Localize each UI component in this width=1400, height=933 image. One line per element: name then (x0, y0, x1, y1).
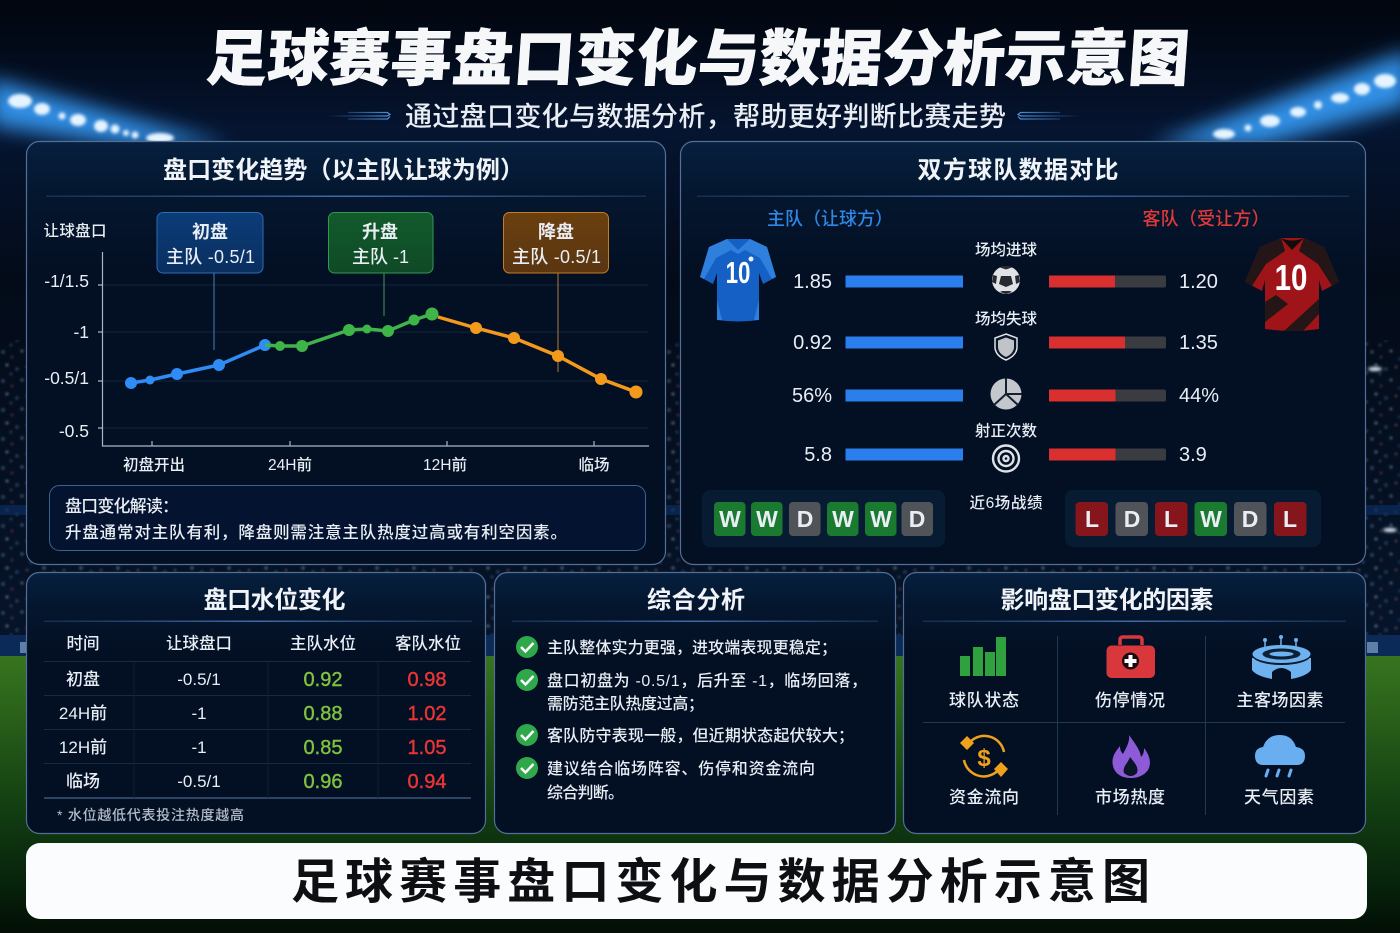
away recent form: L (1164, 506, 1178, 532)
away recent form: D (1242, 506, 1258, 532)
title: 足球赛事盘口变化与数据分析示意图 (204, 25, 1192, 93)
factor: home and away stadium: 主客场因素 (1236, 690, 1324, 710)
factor: market heat (1095, 735, 1165, 807)
interpretation note: 盘口变化解读： (65, 496, 179, 516)
stat row: possession: 56% (792, 385, 832, 407)
table: water levels: -1 (191, 704, 207, 723)
icon: red jersey: 10 (1275, 257, 1307, 298)
line chart: 让球盘口 (44, 222, 106, 240)
icon: red jersey (1245, 238, 1339, 331)
table: water levels: 0.94 (408, 771, 446, 793)
factor: injuries: 伤停情况 (1095, 691, 1165, 710)
table: water levels: -0.5/1 (177, 670, 221, 689)
stat row: goals against (793, 310, 1218, 360)
callout: line rise: 升盘 (362, 221, 398, 242)
series: drop in orange (438, 317, 642, 398)
table: water levels: 主队水位 (290, 633, 356, 653)
bullet 1: 主队整体实力更强，进攻端表现更稳定； (547, 638, 837, 657)
callout: opening line: 主队 -0.5/1 (166, 247, 255, 267)
table: water levels: 24H前 (59, 704, 107, 723)
stat row: goals for: 1.20 (1179, 271, 1218, 293)
factor: team form: 球队状态 (949, 691, 1019, 710)
line chart: 临场 (578, 456, 610, 474)
callout: line drop: 降盘 (538, 221, 574, 242)
stat row: shots on target (804, 422, 1207, 472)
bullet 4: 建议结合临场阵容、伤停和资金流向 (547, 759, 815, 778)
table: water levels: 0.88 (304, 703, 342, 725)
away recent form: D (1124, 506, 1140, 532)
callout: opening line (157, 212, 263, 273)
heading: team comparison: 双方球队数据对比 (918, 156, 1118, 184)
home recent form: D (909, 506, 925, 532)
callout: line rise (328, 212, 433, 273)
table: water levels: 初盘 (66, 670, 100, 689)
panel: influencing factors (904, 572, 1366, 834)
stat row: possession: 44% (1179, 385, 1219, 407)
callout: line drop (504, 212, 608, 273)
stat row: goals against: 场均失球 (975, 310, 1037, 328)
stat row: shots on target: 射正次数 (975, 422, 1037, 440)
callout: opening line: 初盘 (192, 221, 228, 242)
home recent form: W (832, 506, 854, 532)
factor: home and away stadium (1236, 635, 1324, 710)
line chart: -1 (73, 322, 89, 342)
icon: blue jersey: 10 (726, 255, 750, 290)
bullet 2: 需防范主队热度过高； (547, 694, 704, 713)
factor: money flow: $ (977, 745, 991, 772)
home recent form (702, 490, 945, 547)
table: water levels: 0.96 (304, 771, 342, 793)
home team label: 主队（让球方） (767, 209, 893, 229)
panel: overall analysis (494, 572, 896, 834)
table: water levels: 1.05 (408, 737, 446, 759)
home recent form: W (719, 506, 741, 532)
away recent form (1065, 490, 1321, 547)
callout: line rise: 主队 -1 (352, 247, 409, 267)
bullet 4 (516, 757, 815, 802)
series: rise in green (265, 308, 438, 352)
line chart: 初盘开出 (123, 456, 185, 474)
line chart: -0.5 (59, 421, 89, 441)
series: opening in blue (125, 339, 271, 389)
stat row: possession (792, 378, 1219, 410)
bullet 2 (516, 669, 867, 713)
factor: weather: 天气因素 (1244, 788, 1314, 807)
bullet 3: 客队防守表现一般，但近期状态起伏较大； (547, 726, 854, 745)
table: water levels: 让球盘口 (166, 634, 232, 653)
heading: water levels: 盘口水位变化 (204, 586, 346, 614)
interpretation note (50, 486, 646, 550)
stat row: goals against: 0.92 (793, 332, 832, 354)
interpretation note: 升盘通常对主队有利，降盘则需注意主队热度过高或有利空因素。 (65, 523, 567, 542)
footnote: * 水位越低代表投注热度越高 (57, 807, 244, 823)
recent form label: 近6场战绩 (970, 494, 1043, 512)
bullet 2: 盘口初盘为 -0.5/1，后升至 -1，临场回落， (547, 672, 867, 690)
stat row: goals for: 1.85 (793, 271, 832, 293)
bullet 4: 综合判断。 (547, 783, 624, 802)
panel: water level changes (26, 572, 486, 834)
factor: money flow: 资金流向 (949, 787, 1019, 807)
factor: money flow (949, 736, 1019, 807)
table: water levels: 0.98 (408, 669, 446, 691)
factor: weather (1244, 735, 1314, 807)
factor: market heat: 市场热度 (1095, 788, 1165, 807)
bullet 1 (516, 636, 837, 658)
icon: football (992, 266, 1020, 294)
panel: handicap trend (26, 142, 666, 564)
table: water levels: 1.02 (408, 703, 446, 725)
away recent form: L (1283, 506, 1297, 532)
line chart (44, 222, 649, 474)
table: water levels: 0.92 (304, 669, 342, 691)
factor: injuries (1095, 637, 1165, 710)
table: water levels: 客队水位 (395, 633, 461, 653)
callout: line drop: 主队 -0.5/1 (512, 247, 601, 267)
icon: target (993, 446, 1019, 472)
icon: shield (995, 334, 1017, 360)
away recent form: W (1200, 506, 1222, 532)
stat row: shots on target: 3.9 (1179, 444, 1207, 466)
line chart: -1/1.5 (44, 271, 89, 291)
callout connectors (214, 273, 558, 372)
icon: pie chart (990, 378, 1022, 410)
line chart: -0.5/1 (44, 368, 89, 388)
stat row: goals against: 1.35 (1179, 332, 1218, 354)
subtitle: 通过盘口变化与数据分析，帮助更好判断比赛走势 (405, 102, 1006, 132)
table: water levels: -1 (191, 738, 207, 757)
table: water levels: 临场 (66, 772, 100, 791)
bottom banner (26, 843, 1367, 919)
icon: blue jersey (700, 239, 776, 322)
table: water levels: 0.85 (304, 737, 342, 759)
factor: team form (949, 637, 1019, 710)
panel: team comparison (680, 142, 1366, 564)
line chart: 24H前 (268, 456, 312, 474)
home recent form: W (756, 506, 778, 532)
table: water levels: -0.5/1 (177, 772, 221, 791)
stat row: goals for: 场均进球 (975, 241, 1037, 259)
away recent form: L (1085, 506, 1099, 532)
stat row: goals for (793, 241, 1218, 294)
table: water levels: 12H前 (59, 738, 107, 757)
heading: overall analysis: 综合分析 (647, 587, 745, 614)
home recent form: W (870, 506, 892, 532)
heading: influencing factors: 影响盘口变化的因素 (1000, 586, 1214, 614)
away team label: 客队（受让方） (1142, 209, 1270, 229)
table: water levels (44, 633, 471, 798)
line chart: 12H前 (423, 456, 467, 474)
table: water levels: 时间 (66, 634, 100, 653)
stat row: shots on target: 5.8 (804, 444, 832, 466)
home recent form: D (797, 506, 813, 532)
bottom banner: 足球赛事盘口变化与数据分析示意图 (291, 856, 1150, 909)
heading: handicap trend: 盘口变化趋势（以主队让球为例） (163, 156, 524, 184)
